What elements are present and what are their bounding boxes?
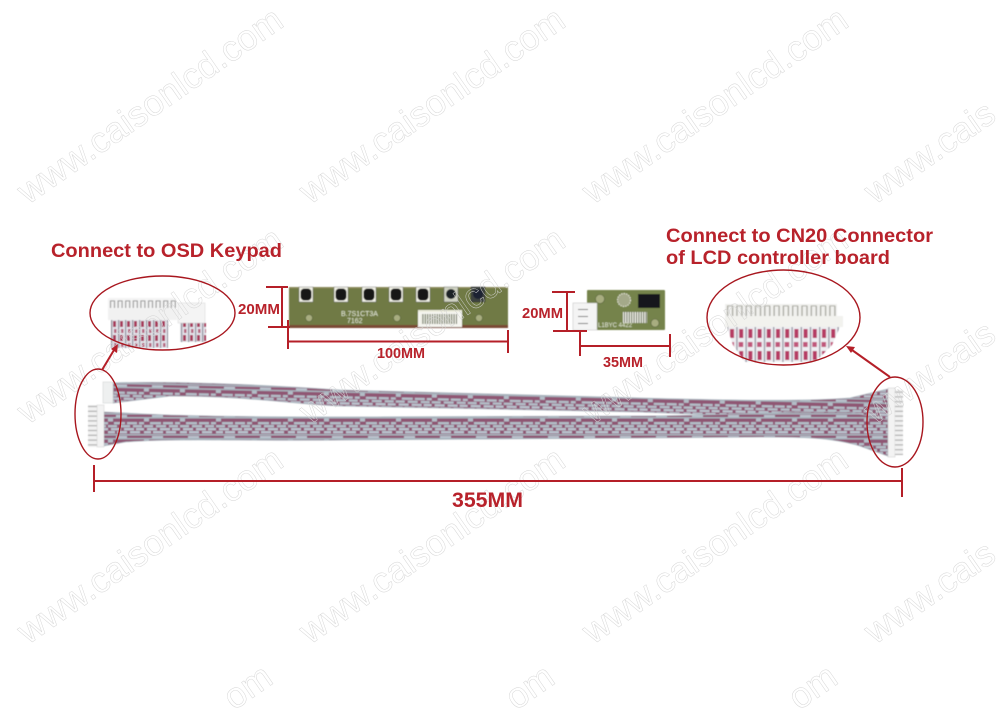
receiver marking: L1BYC 4422	[598, 323, 633, 329]
heading: OSD keypad connection: Connect to OSD Keypad	[51, 240, 282, 262]
magnified CN20 connector photo	[725, 304, 843, 362]
arrow to OSD magnifier	[102, 344, 118, 370]
right cable end ring	[867, 377, 923, 467]
watermarks: www.caisonlcd.com	[8, 218, 290, 432]
callout rings	[75, 270, 923, 467]
watermarks: om	[497, 655, 562, 718]
watermarks: www.caisonlcd.com	[8, 438, 290, 652]
infrared sensor	[638, 294, 660, 308]
watermarks: www.caisonlcd.com	[573, 438, 855, 652]
OSD magnifier ring	[90, 276, 235, 350]
watermarks: www.caisonlcd.com	[290, 218, 572, 432]
left cable end ring	[75, 369, 121, 459]
watermarks: om	[780, 655, 845, 718]
dimension: receiver height 20MM: 20MM	[522, 305, 563, 322]
board marking: B.7S1CT3A	[341, 311, 378, 318]
ribbon cable assembly	[88, 382, 903, 457]
right connector	[888, 388, 903, 457]
lower mounting hole	[651, 319, 659, 327]
keypad buttons	[299, 287, 485, 302]
dimension: keypad width 100MM	[288, 320, 508, 362]
hatched pad	[623, 312, 647, 323]
watermarks: om	[215, 655, 280, 718]
keypad circuit board	[289, 287, 508, 328]
keypad connector	[418, 310, 462, 327]
dimension: keypad height 20MM: 20MM	[238, 301, 280, 318]
mounting holes	[306, 314, 482, 322]
watermarks: www.cais	[855, 532, 1000, 652]
receiver connector	[573, 303, 597, 330]
receiver hole	[596, 294, 604, 304]
watermarks: www.caisonlcd.com	[573, 0, 855, 212]
arrow to CN20 magnifier	[846, 346, 890, 377]
watermarks: www.caisonlcd.com	[290, 0, 572, 212]
dimension: cable length 355MM	[94, 465, 902, 512]
board marking: 7162	[347, 318, 363, 325]
infrared receiver board	[573, 290, 665, 330]
dimension: receiver width 35MM: 35MM	[603, 355, 643, 371]
heading: CN20 connector connection	[666, 225, 933, 269]
lower ribbon cable	[103, 412, 888, 456]
dimension: receiver height 20MM	[522, 292, 587, 331]
dimension: receiver width 35MM	[580, 330, 670, 371]
CN20 magnifier ring	[707, 270, 860, 365]
heading: CN20 connector connection: Connect to CN20 Connector	[666, 225, 933, 247]
watermarks: www.caisonlcd.com	[573, 218, 855, 432]
board marking	[341, 311, 378, 325]
left small connector	[103, 382, 113, 403]
left large connector	[88, 405, 104, 447]
watermarks: www.caisonlcd.com	[8, 0, 290, 212]
magnified OSD connector photo	[108, 298, 206, 348]
watermarks: www.caisonlcd.com	[290, 438, 572, 652]
dimension: keypad height 20MM	[238, 287, 290, 327]
heading: CN20 connector connection: of LCD controller board	[666, 247, 890, 269]
dimension: keypad width 100MM: 100MM	[377, 346, 425, 362]
dimension: cable length 355MM: 355MM	[452, 489, 523, 512]
watermarks: www.cais	[855, 312, 1000, 432]
upper ribbon cable	[113, 382, 888, 425]
indicator LED	[618, 294, 630, 306]
watermarks: www.cais	[855, 92, 1000, 212]
